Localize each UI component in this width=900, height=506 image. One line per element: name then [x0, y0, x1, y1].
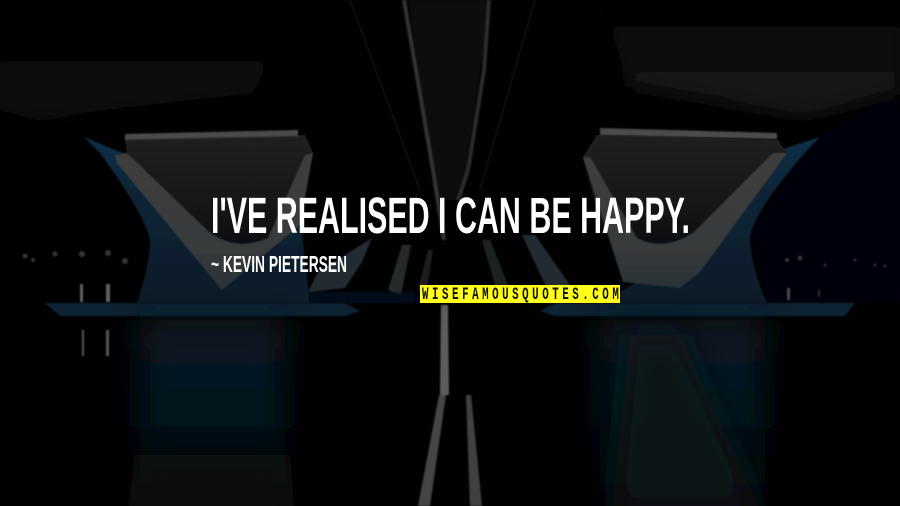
attribution: ~ KEVIN PIETERSEN — [211, 251, 347, 277]
pier light strip — [600, 128, 777, 139]
left pier — [45, 130, 360, 316]
pier wall — [583, 135, 787, 246]
ceiling underside: left — [0, 0, 300, 117]
pier pale band — [583, 153, 787, 288]
pier bowl shadow — [205, 230, 270, 248]
pier blue body — [84, 137, 310, 303]
right pier — [540, 128, 855, 316]
pier wall — [125, 135, 313, 246]
horizon city lights: left — [22, 250, 128, 302]
pier pale band — [115, 153, 313, 290]
inner piers — [308, 235, 595, 303]
pier blue body — [600, 137, 820, 303]
sky: left navy — [0, 92, 150, 302]
ceiling underside: right — [600, 0, 900, 114]
pier light strip — [125, 130, 298, 140]
pier base — [45, 303, 360, 316]
horizon city lights: right — [785, 256, 886, 300]
water reflection: left — [82, 320, 296, 506]
sky: right navy — [750, 92, 900, 302]
watermark badge: WISEFAMOUSQUOTES.COM — [422, 286, 619, 305]
water reflection: right — [600, 320, 770, 506]
central light reflection — [418, 305, 482, 506]
central bridge deck — [350, 0, 535, 240]
pier base — [540, 303, 855, 316]
pier bowl shadow — [630, 232, 695, 250]
